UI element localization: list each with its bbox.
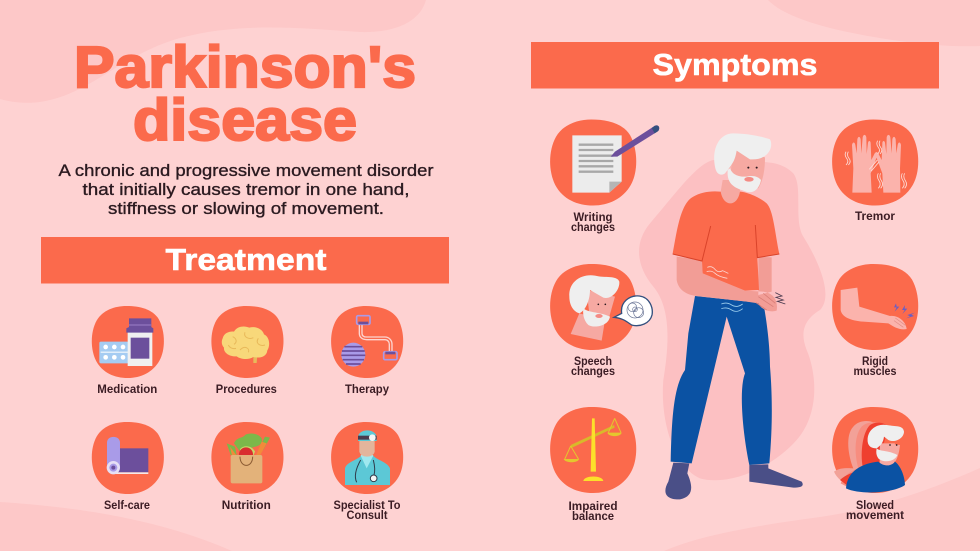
icon: specialist: [331, 422, 403, 494]
icon: procedures: [211, 306, 283, 378]
label: Procedures: Procedures: [216, 384, 277, 396]
jeans: [671, 296, 772, 465]
icon: therapy: [331, 306, 403, 378]
illustration: elderly man with tremor: [665, 133, 803, 499]
label: Slowed movement: movement: [846, 510, 904, 522]
title: disease: [133, 88, 357, 153]
icon: rigid muscles: [832, 264, 918, 350]
description text: stiffness or slowing of movement.: [108, 199, 384, 218]
heading: Symptoms: Symptoms: [652, 47, 818, 82]
icon: medication: [92, 306, 164, 378]
icon: self-care: [92, 422, 164, 494]
label: Rigid muscles: Rigid: [862, 356, 888, 368]
icon: slowed movement: [832, 407, 918, 493]
title: [74, 35, 416, 153]
arms: [677, 257, 777, 311]
label: Rigid muscles: muscles: [854, 366, 896, 378]
description text: [58, 161, 434, 218]
description text: A chronic and progressive movement disorder: [58, 161, 434, 180]
label: Medication: Medication: [97, 384, 157, 396]
label: Nutrition: Nutrition: [222, 500, 271, 512]
icon: speech changes: [550, 264, 652, 350]
icon: tremor: [832, 120, 918, 206]
label: Self-care: Self-care: [104, 500, 150, 512]
label: Impaired balance: balance: [572, 511, 614, 523]
label: Rigid muscles: [854, 356, 896, 378]
tremor marks: [707, 267, 785, 311]
label: Tremor: Tremor: [855, 211, 896, 223]
figure backdrop blob: [639, 160, 825, 480]
label: Writing changes: [571, 212, 615, 234]
label: Speech changes: [571, 356, 615, 378]
description text: that initially causes tremor in one hand,: [82, 180, 409, 199]
heading: Treatment: [41, 237, 449, 284]
socks: [665, 463, 803, 499]
neck: [721, 180, 740, 203]
shirt: [673, 191, 779, 291]
label: Therapy: Therapy: [345, 384, 390, 396]
label: Specialist To Consult: Consult: [346, 510, 388, 522]
label: Specialist To Consult: [334, 500, 400, 522]
label: Writing changes: Writing: [574, 212, 612, 224]
icon: impaired balance: [550, 407, 636, 493]
icon: nutrition: [211, 422, 283, 494]
label: Impaired balance: Impaired: [568, 501, 618, 513]
heading: Symptoms: [531, 42, 939, 88]
head: [714, 133, 771, 192]
label: Speech changes: changes: [571, 366, 615, 378]
heading: Treatment: Treatment: [166, 242, 326, 277]
label: Speech changes: Speech: [574, 356, 612, 368]
title: Parkinson's: [74, 35, 416, 100]
label: Impaired balance: [568, 501, 618, 523]
panel: symptom icons: [550, 120, 918, 523]
label: Slowed movement: Slowed: [856, 500, 894, 512]
panel: treatment icons: [92, 306, 403, 522]
label: Specialist To Consult: Specialist To: [334, 500, 400, 512]
label: Slowed movement: [846, 500, 904, 522]
label: Writing changes: changes: [571, 222, 615, 234]
icon: writing changes: [550, 120, 659, 206]
